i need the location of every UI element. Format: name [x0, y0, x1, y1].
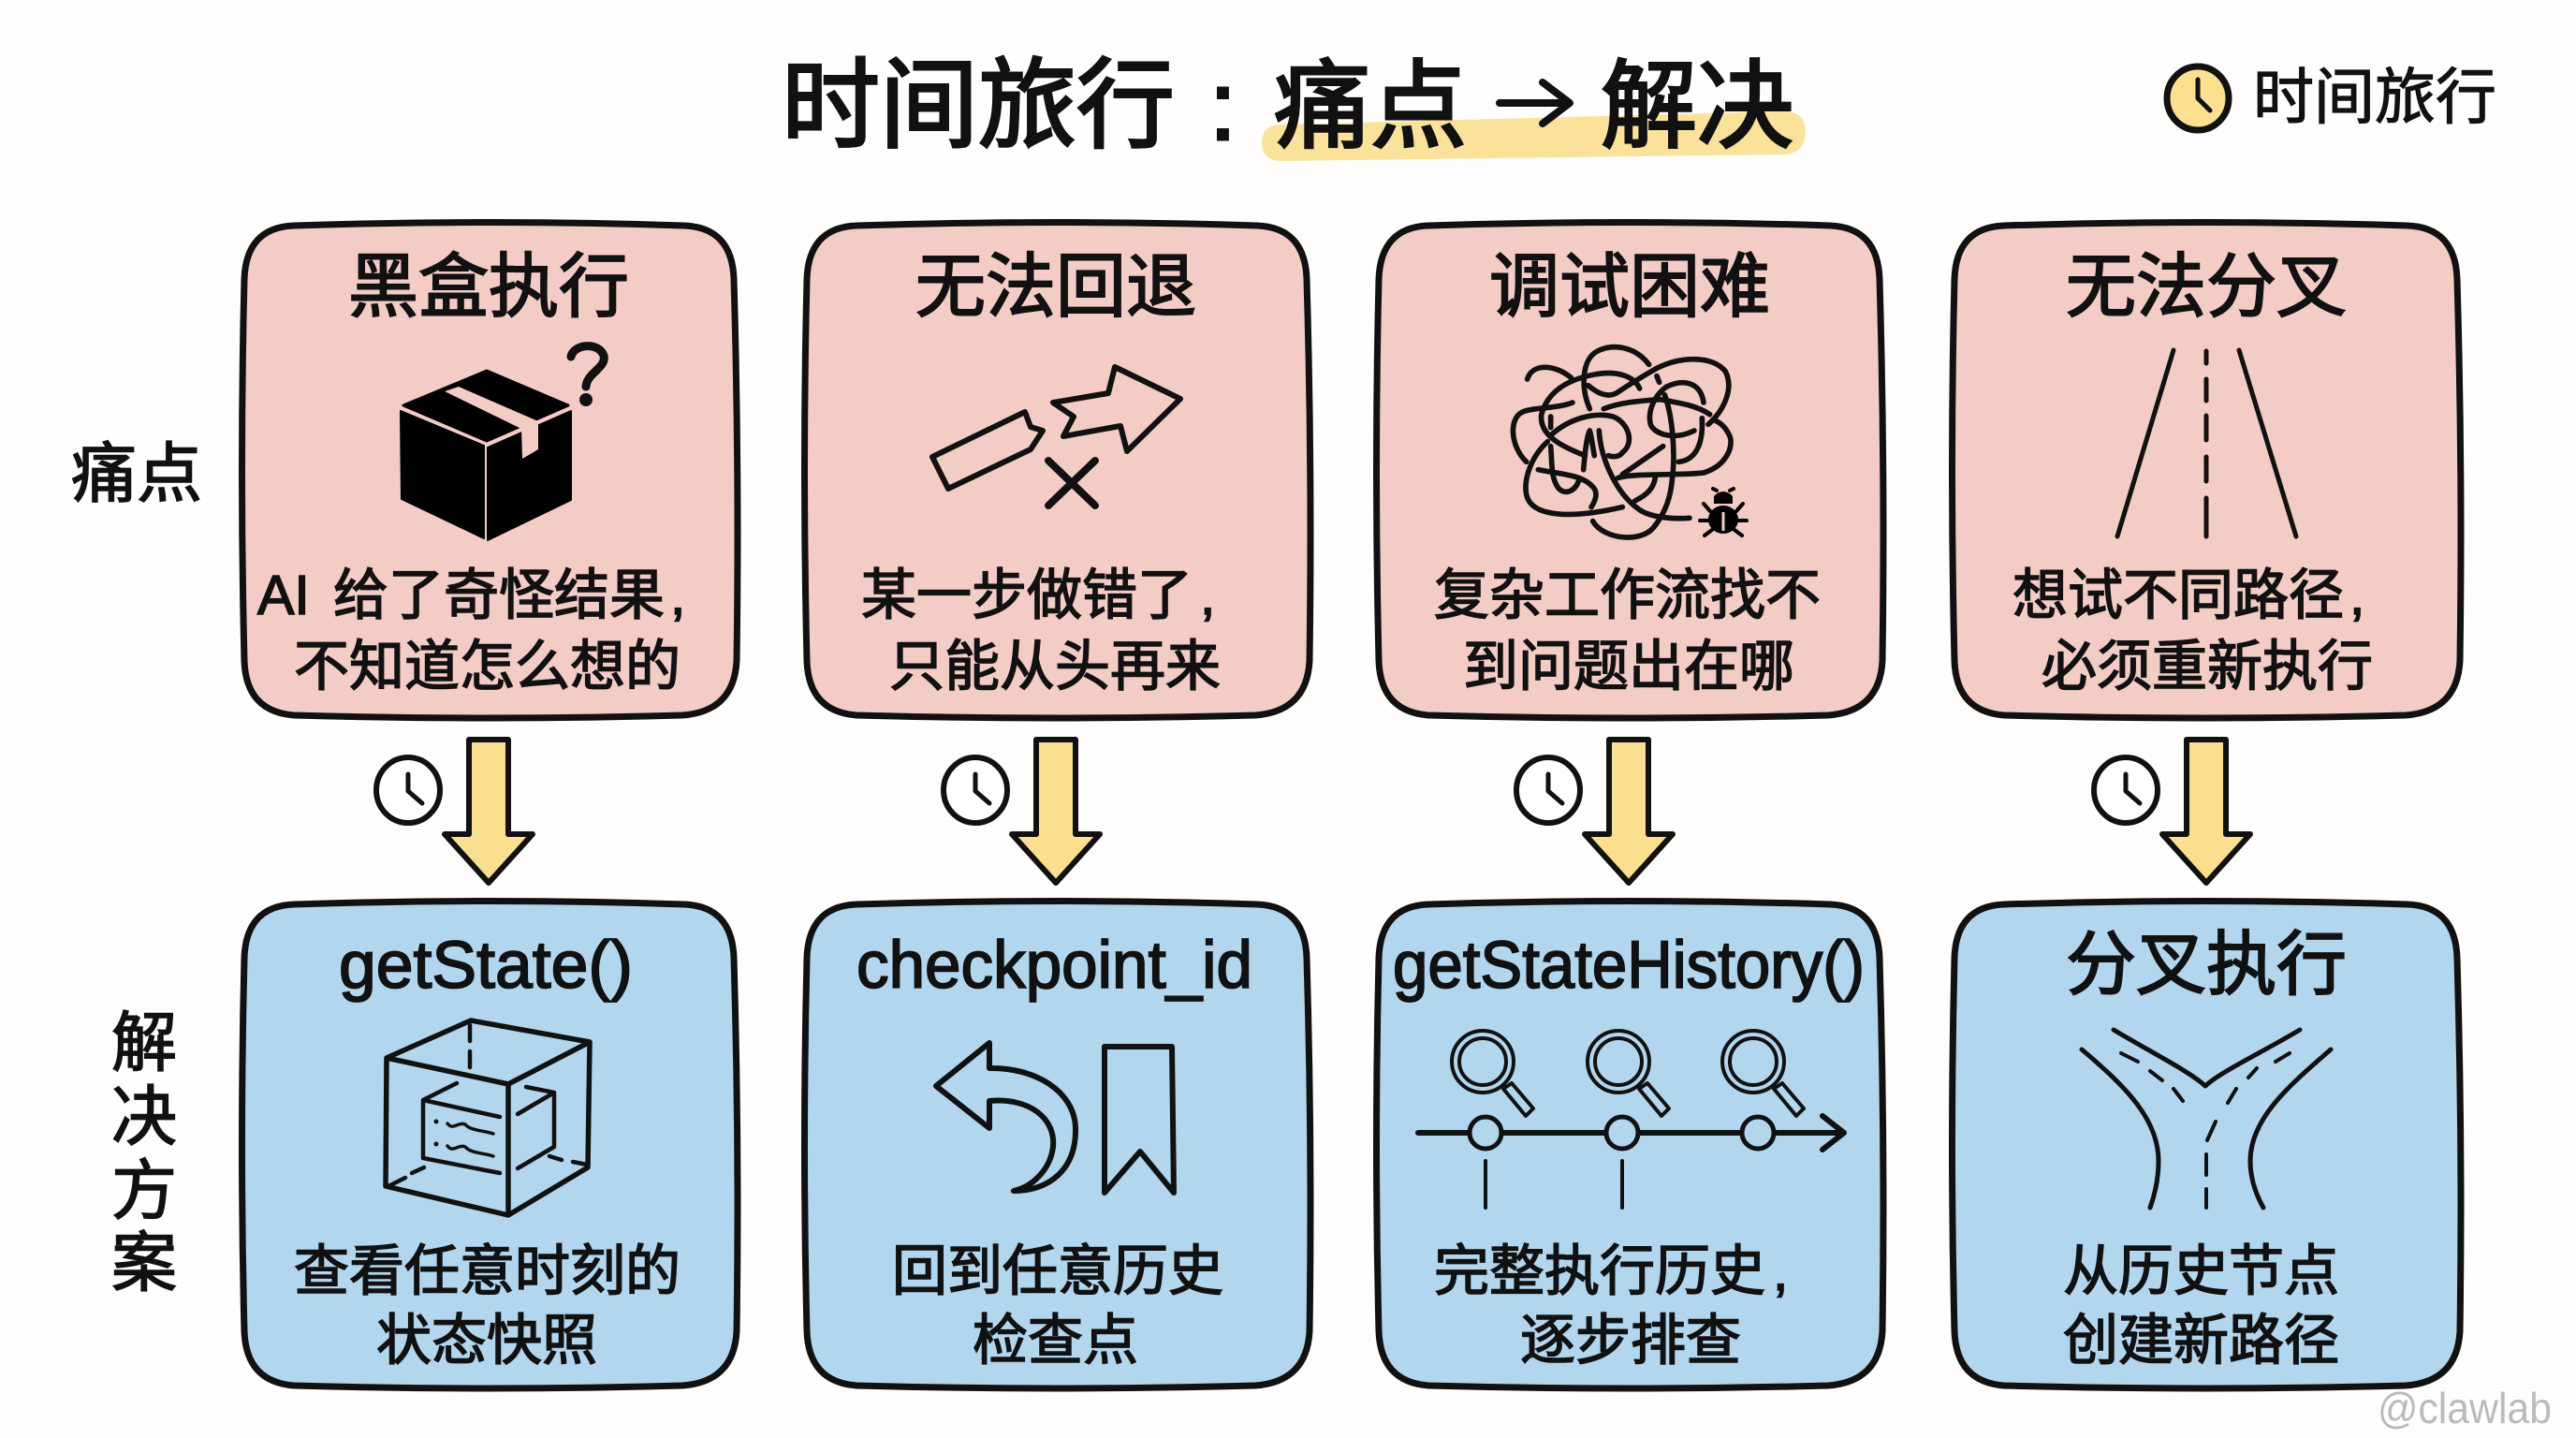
title text: :: [1209, 52, 1237, 161]
description: 复杂工作流找不: [1434, 565, 1821, 626]
title text: 解决: [1601, 52, 1793, 160]
description: 想试不同路径,: [2012, 565, 2364, 626]
arrow: [1012, 740, 1100, 883]
card background: [242, 223, 738, 718]
card background: [1953, 223, 2461, 718]
icon: tangled threads with bug: [1513, 347, 1747, 537]
heading: 黑盒执行: [348, 247, 629, 326]
description: 不知道怎么想的: [294, 636, 681, 697]
card background: [242, 901, 738, 1388]
description: [2012, 565, 2373, 697]
description: [892, 1240, 1223, 1372]
panel: hard to debug: [1376, 223, 1883, 718]
row label: solutions: 案: [111, 1226, 177, 1299]
description: 查看任意时刻的: [294, 1240, 681, 1302]
arrow 2 with clock: [944, 740, 1100, 883]
description: 检查点: [973, 1310, 1138, 1372]
description: 从历史节点: [2063, 1240, 2339, 1302]
description: 状态快照: [376, 1310, 597, 1372]
card background: [1376, 901, 1883, 1388]
heading: checkpoint_id: [856, 929, 1252, 1003]
legend: [2167, 63, 2496, 131]
icon: clock: [944, 757, 1007, 823]
icon: straight road: [2117, 350, 2296, 536]
arrow 1 with clock: [376, 740, 533, 883]
card background: [1953, 901, 2461, 1388]
icon: broken arrow with cross: [932, 367, 1180, 506]
card background: [1376, 223, 1883, 718]
description: 完整执行历史,: [1434, 1240, 1788, 1302]
heading: 调试困难: [1489, 247, 1770, 326]
description: 必须重新执行: [2042, 636, 2373, 697]
panel: checkpoint_id: [805, 901, 1310, 1388]
title text: 时间旅行: [782, 51, 1175, 161]
arrow: [1585, 740, 1673, 883]
description: ,: [670, 565, 685, 626]
title highlight: [1262, 111, 1806, 161]
icon: legend clock: [2167, 66, 2229, 130]
description: 某一步做错了,: [861, 565, 1215, 626]
arrow: [445, 740, 533, 883]
description: 回到任意历史: [892, 1240, 1223, 1302]
description: 创建新路径: [2063, 1310, 2339, 1372]
panel: cannot roll back: [805, 223, 1310, 718]
icon: clock: [376, 757, 440, 823]
description: [1434, 565, 1821, 697]
watermark: @clawlab: [2378, 1384, 2552, 1432]
icon: clock: [1516, 757, 1580, 823]
icon: transparent cube with snapshot: [386, 1020, 590, 1215]
title arrow: [1500, 82, 1570, 124]
arrow 4 with clock: [2094, 740, 2250, 883]
heading: 无法回退: [915, 247, 1196, 326]
card background: [805, 901, 1310, 1388]
panel: getState: [242, 901, 738, 1388]
description: 只能从头再来: [889, 636, 1221, 697]
arrow 3 with clock: [1516, 740, 1673, 883]
card background: [805, 223, 1310, 718]
description: [861, 565, 1221, 697]
title text: [782, 51, 1793, 161]
description: 给了奇怪结果: [333, 565, 665, 626]
arrow: [2162, 740, 2250, 883]
panel: fork execution: [1953, 901, 2461, 1388]
row label: solutions: 解: [111, 1006, 177, 1079]
legend text: 时间旅行: [2253, 63, 2496, 131]
description: [2063, 1240, 2339, 1372]
icon: timeline with magnifiers: [1418, 1031, 1844, 1208]
panel: getStateHistory: [1376, 901, 1883, 1388]
panel: cannot branch: [1953, 223, 2461, 718]
heading: getState(): [339, 929, 633, 1003]
row label: solutions: 决: [111, 1080, 177, 1153]
row label: pain points: 痛点: [71, 437, 202, 510]
heading: 分叉执行: [2066, 925, 2347, 1004]
icon: back arrow and bookmark: [936, 1043, 1174, 1193]
icon: clock: [2094, 757, 2158, 823]
description: AI: [257, 565, 310, 626]
row label: solutions: 方: [111, 1154, 177, 1227]
heading: getStateHistory(): [1393, 929, 1865, 1003]
heading: 无法分叉: [2066, 247, 2347, 326]
description: 到问题出在哪: [1463, 636, 1794, 697]
panel: black box execution: [242, 223, 738, 718]
description: [1434, 1240, 1788, 1372]
description: [257, 565, 685, 697]
title: [782, 51, 1806, 161]
icon: bug: [1700, 489, 1747, 536]
description: 逐步排查: [1520, 1310, 1741, 1372]
row label: solutions: [111, 1006, 177, 1299]
icon: cardboard box with question mark: [401, 346, 604, 540]
title text: 痛点: [1274, 52, 1467, 160]
description: [294, 1240, 681, 1372]
icon: forked road: [2082, 1030, 2331, 1208]
